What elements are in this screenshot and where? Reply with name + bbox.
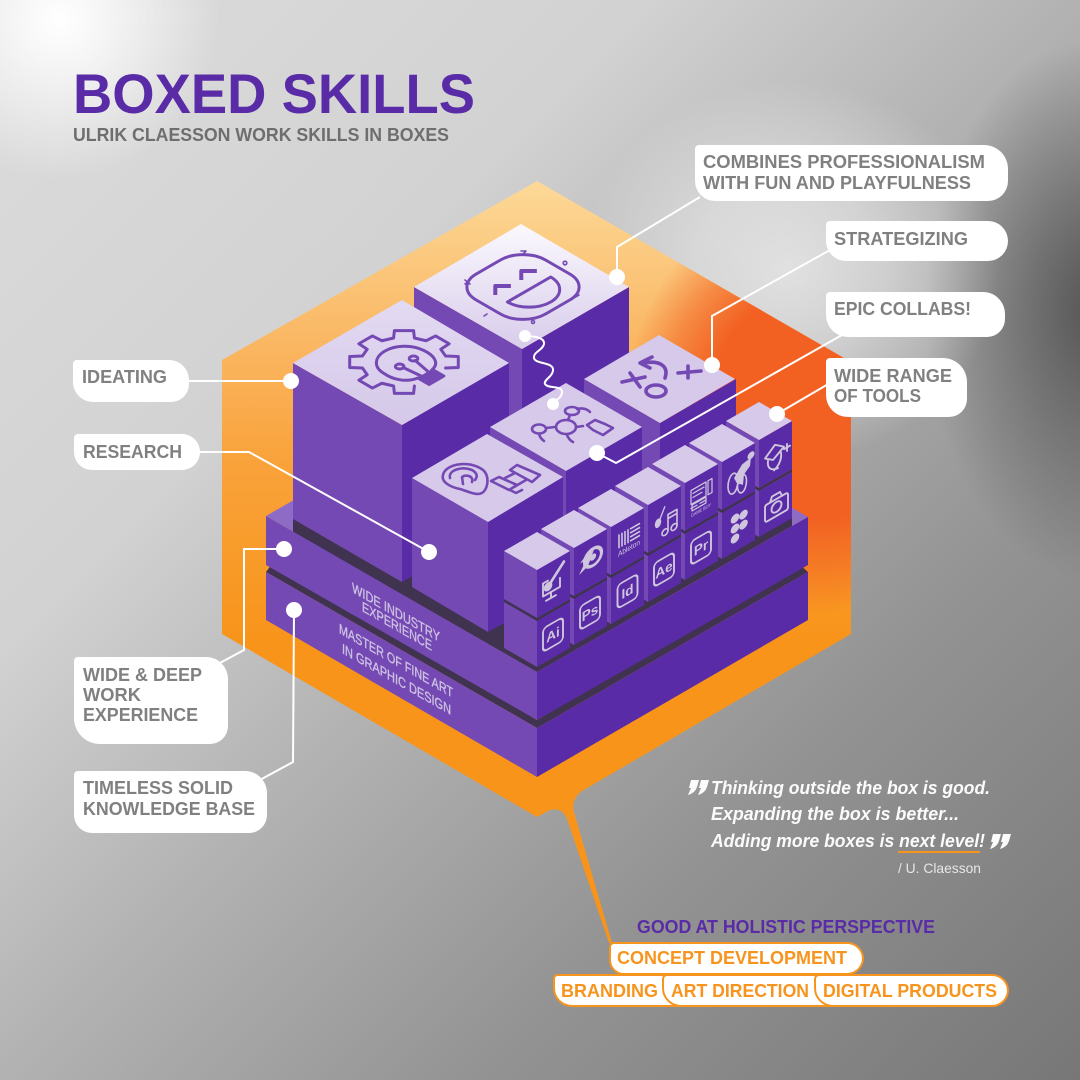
box: ideating (293, 300, 509, 582)
icon: figma (731, 507, 748, 545)
icon: Ps: Ps (582, 601, 598, 626)
callout: timeless solid knowledge base: TIMELESS SOLID (83, 777, 233, 798)
icon: game boy: GAME BOY (691, 502, 711, 519)
icon: ableton: Ableton (618, 538, 640, 559)
icon: small doodle marks (465, 251, 579, 324)
tool cube column 4: music and after effects (615, 467, 681, 602)
callout: ideating: IDEATING (82, 366, 167, 387)
quote (688, 777, 1011, 876)
tool cube column 2: blender and photoshop (541, 510, 607, 645)
box: smiley / playfulness (414, 224, 629, 462)
icon: camera (765, 487, 788, 523)
callout: timeless solid knowledge base: KNOWLEDGE BASE (83, 798, 255, 819)
callout: timeless solid knowledge base (74, 602, 302, 833)
tool cube column 5: game boy and premiere (652, 445, 718, 580)
box: research (412, 434, 563, 632)
icon: student hat plus (765, 436, 790, 476)
callout: epic collabs: EPIC COLLABS! (834, 298, 971, 319)
tag: digital products (815, 975, 1008, 1006)
callout: combines professionalism: COMBINES PROFESSIONALISM (703, 151, 985, 172)
tag: art direction: ART DIRECTION (671, 980, 809, 1001)
tag: branding (554, 975, 690, 1006)
tool cube column 3: ableton and indesign (578, 489, 644, 624)
callout: research: RESEARCH (83, 441, 182, 462)
callout: strategizing (704, 221, 1008, 373)
callout: wide and deep work experience: WORK (83, 684, 142, 705)
callout: wide and deep work experience (74, 541, 292, 744)
upper slab: wide industry experience (266, 360, 808, 720)
underline (898, 851, 980, 853)
tag: art direction (663, 975, 840, 1006)
callout: wide and deep work experience: WIDE & DEEP (83, 664, 202, 685)
slab text: wide industry experience: WIDE INDUSTRY (352, 580, 440, 646)
icon: Ai: Ai (546, 624, 560, 647)
quote: Expanding the box is better... (711, 803, 959, 824)
callout: combines professionalism: WITH FUN AND PLAYFULNESS (703, 172, 971, 193)
attribution: / U. Claesson (898, 860, 981, 876)
icon: brush and monitor (543, 561, 564, 603)
slab text: master of fine art: IN GRAPHIC DESIGN (342, 641, 451, 719)
callout: strategizing: STRATEGIZING (834, 228, 968, 249)
wavy connector between smiley and collab boxes (519, 330, 562, 410)
orange hexagon background with tail (222, 181, 851, 943)
tag: concept development (610, 943, 863, 974)
box: collaboration (490, 383, 642, 570)
icon: Id: Id (622, 581, 633, 603)
box: strategizing (584, 335, 736, 524)
icon: ear and binoculars (443, 464, 540, 494)
tool cube column 1: brush monitor and illustrator (504, 532, 570, 667)
icon: cyclist (728, 450, 754, 501)
slab text: master of fine art: MASTER OF FINE ART (339, 621, 453, 702)
callout: ideating (73, 360, 299, 402)
icon: blender (579, 542, 602, 575)
icon: smiley face (454, 247, 592, 327)
callout: research (74, 434, 437, 560)
quote: Adding more boxes is next level! (710, 830, 985, 851)
holistic heading: GOOD AT HOLISTIC PERSPECTIVE (637, 916, 935, 937)
callout: wide range of tools: OF TOOLS (834, 385, 921, 406)
icon: Ae: Ae (655, 558, 673, 583)
callout: wide range of tools (769, 358, 967, 422)
slab text: wide industry experience: EXPERIENCE (362, 599, 432, 655)
callout: epic collabs (589, 292, 1005, 463)
lower slab: master of fine art (266, 564, 808, 777)
callout: wide range of tools: WIDE RANGE (834, 365, 952, 386)
icon: connected people (532, 407, 613, 442)
subtitle: ULRIK CLAESSON WORK SKILLS IN BOXES (73, 125, 449, 145)
tool cube column 7: hat and camera (726, 402, 792, 537)
icon: Pr: Pr (694, 537, 708, 560)
icon: closing quote mark (990, 834, 1011, 849)
icon: x o play diagram (622, 357, 701, 397)
callout: combines professionalism (609, 145, 1008, 285)
tag: digital products: DIGITAL PRODUCTS (823, 980, 997, 1001)
callout: wide and deep work experience: EXPERIENCE (83, 704, 198, 725)
tag: branding: BRANDING (561, 980, 658, 1001)
quote: Thinking outside the box is good. (711, 777, 990, 798)
tool cube column 6: cyclist and figma (689, 424, 755, 559)
icon: gear with light bulb (327, 318, 474, 403)
icon: guitar and note (655, 499, 677, 541)
title: BOXED SKILLS (73, 62, 475, 125)
icon: opening quote mark (688, 780, 709, 795)
tag: concept development: CONCEPT DEVELOPMENT (617, 947, 848, 968)
